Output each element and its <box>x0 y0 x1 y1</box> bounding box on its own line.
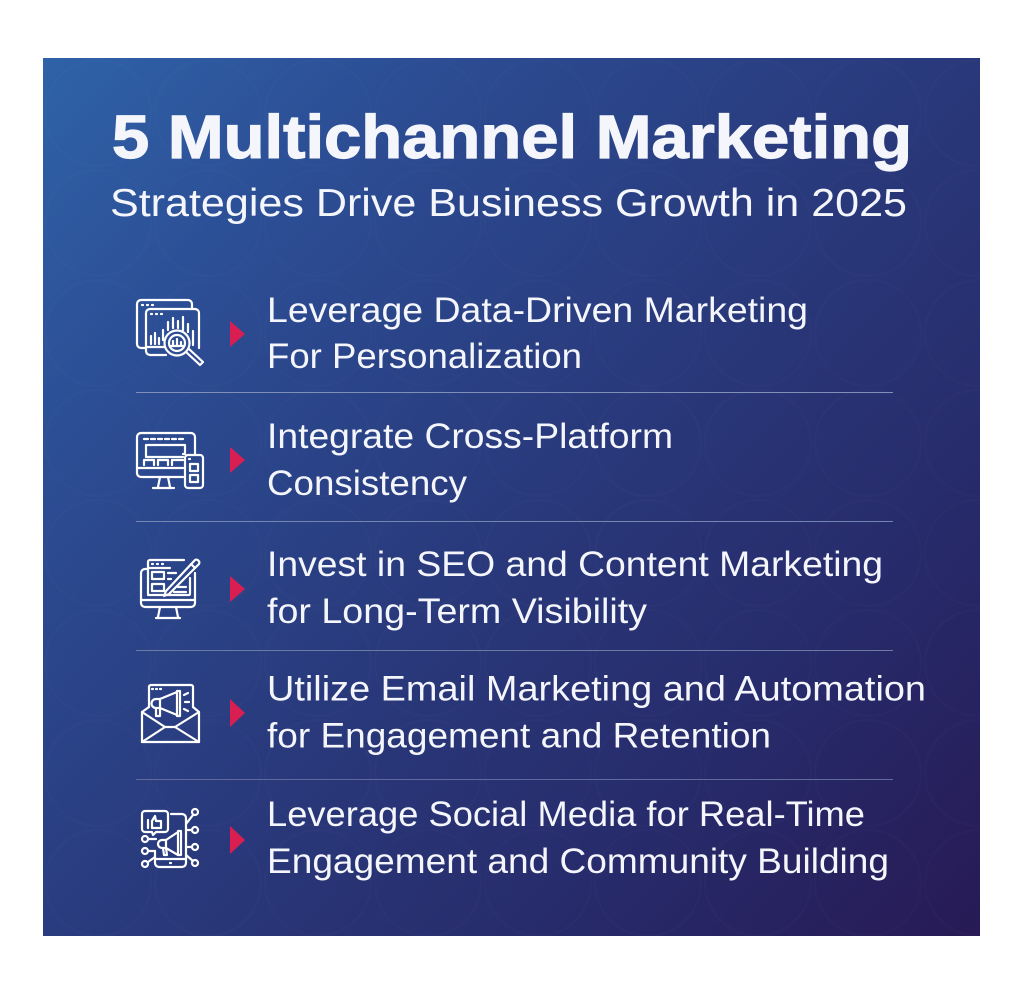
icon: monitor and phone <box>137 433 203 488</box>
text: Consistency <box>267 464 468 503</box>
text <box>267 291 808 376</box>
text <box>267 795 889 881</box>
arrow <box>230 576 245 602</box>
icon: envelope with megaphone <box>142 685 199 742</box>
text: For Personalization <box>267 337 582 376</box>
arrow <box>230 826 245 854</box>
text: Leverage Data-Driven Marketing <box>267 291 808 330</box>
icon: analytics window with magnifier <box>137 300 203 365</box>
subtitle: Strategies Drive Business Growth in 2025 <box>110 182 907 225</box>
text: Engagement and Community Building <box>267 842 889 881</box>
row 2 <box>137 417 673 503</box>
text: Leverage Social Media for Real-Time <box>267 795 865 834</box>
row 4 <box>142 670 926 756</box>
text: for Long-Term Visibility <box>267 592 648 631</box>
text: Utilize Email Marketing and Automation <box>267 670 926 708</box>
arrow <box>230 699 245 727</box>
text <box>267 670 926 756</box>
title <box>110 103 912 225</box>
text <box>267 417 673 503</box>
text: Invest in SEO and Content Marketing <box>267 545 883 584</box>
icon: social phone with thumbs up and network <box>142 809 198 867</box>
text: for Engagement and Retention <box>267 716 771 756</box>
text: Integrate Cross-Platform <box>267 417 673 456</box>
text <box>267 545 883 631</box>
row 1 <box>137 291 808 376</box>
icon: monitor with pencil <box>141 560 199 618</box>
arrow <box>230 447 245 473</box>
title: 5 Multichannel Marketing <box>112 103 912 171</box>
row 5 <box>142 795 889 881</box>
row 3 <box>141 545 883 631</box>
arrow <box>230 321 245 347</box>
